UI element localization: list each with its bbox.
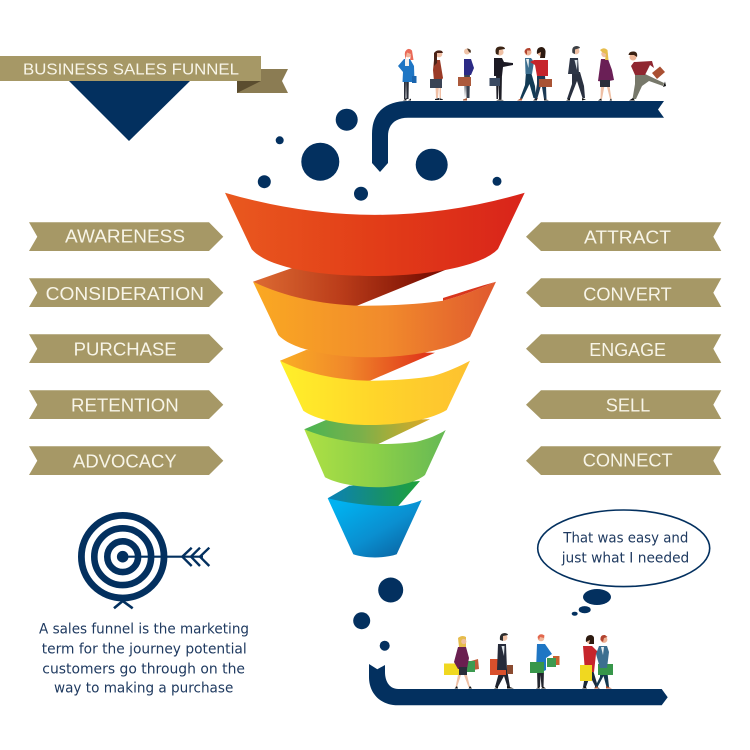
person: woman in blue with green bags (530, 634, 560, 688)
label: engage: ENGAGE (589, 339, 666, 360)
person: man in dark suit (566, 46, 586, 100)
right action labels (526, 222, 721, 475)
speech bubble: That was easy and (562, 531, 688, 547)
banner ribbon (0, 56, 261, 81)
title: BUSINESS SALES FUNNEL (23, 62, 239, 78)
funnel back: green (304, 419, 430, 450)
funnel band: green (304, 429, 446, 487)
red sliver (443, 282, 496, 301)
funnel band: yellow (280, 361, 470, 425)
title triangle (69, 81, 190, 141)
person: running man (628, 51, 666, 100)
description text: customers go through on the (42, 661, 245, 677)
label: consideration: CONSIDERATION (46, 283, 204, 304)
falling dots below funnel (353, 578, 403, 651)
speech bubble (538, 510, 710, 616)
label: purchase (29, 334, 223, 363)
person: woman in blue jacket (398, 49, 416, 100)
banner fold (237, 81, 261, 93)
label: retention: RETENTION (71, 395, 179, 416)
people on bottom conveyor (444, 633, 613, 688)
person: man in red sweater (530, 47, 552, 100)
falling dots above funnel (258, 109, 502, 201)
title banner (0, 56, 288, 93)
description text (39, 621, 249, 697)
label: connect: CONNECT (583, 450, 673, 471)
person: man in navy suit (458, 48, 474, 100)
label: advocacy: ADVOCACY (73, 450, 177, 471)
description text: way to making a purchase (54, 681, 233, 697)
person: woman in purple suit (598, 48, 614, 100)
label: engage (526, 334, 721, 363)
label: retention (29, 390, 223, 419)
label: attract: ATTRACT (584, 227, 671, 248)
funnel back: teal (328, 481, 420, 510)
person: man in black jacket (490, 46, 513, 100)
funnel band: red (225, 193, 525, 276)
sales funnel (225, 193, 525, 557)
description text: term for the journey potential (42, 641, 247, 657)
funnel band: orange (253, 282, 496, 357)
label: connect (526, 446, 721, 475)
speech bubble: just what I needed (561, 551, 689, 567)
funnel band: blue (328, 498, 422, 557)
person: man in red with yellow bag (580, 635, 600, 688)
label: convert: CONVERT (583, 284, 672, 305)
person: man in teal suit (517, 48, 538, 100)
person: woman with yellow bag (444, 636, 479, 688)
label: consideration (29, 278, 223, 307)
label: sell (526, 390, 721, 419)
label: purchase: PURCHASE (74, 339, 177, 360)
left stage labels (29, 222, 223, 475)
people on top conveyor (398, 46, 666, 100)
icon: target with arrow (81, 515, 209, 608)
label: attract (526, 222, 721, 251)
description text: A sales funnel is the marketing (39, 621, 249, 637)
banner tail (237, 69, 288, 93)
label: convert (526, 278, 721, 307)
person: woman in brown coat (430, 50, 443, 100)
funnel back: orange (280, 350, 435, 385)
label: advocacy (29, 446, 223, 475)
bottom conveyor pipe (369, 664, 668, 705)
person: man in teal with green bag (594, 635, 613, 688)
label: awareness (29, 222, 223, 251)
label: awareness: AWARENESS (65, 225, 185, 246)
top conveyor pipe (372, 101, 664, 172)
funnel back: red (253, 267, 450, 310)
person: man with orange bag (490, 633, 514, 688)
label: sell: SELL (606, 395, 650, 416)
